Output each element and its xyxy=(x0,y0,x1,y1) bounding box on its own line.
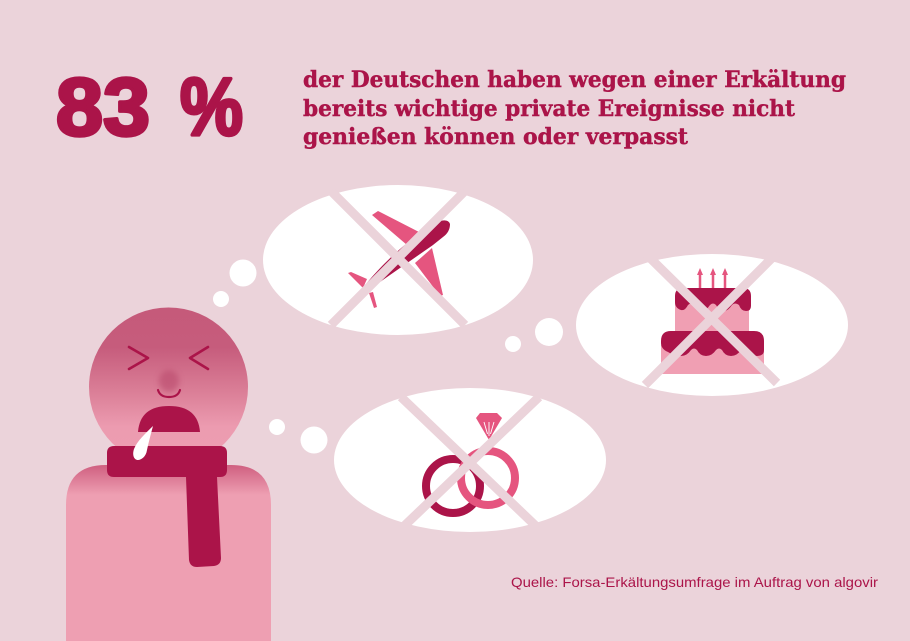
icon: wedding rings xyxy=(426,413,515,513)
scarf xyxy=(107,446,227,567)
thought bubble: wedding rings xyxy=(334,388,606,532)
runny nose drop xyxy=(133,426,153,460)
headline text xyxy=(303,67,846,150)
icon: birthday cake xyxy=(661,268,764,374)
red nose xyxy=(159,370,179,392)
headline statistic: 83 %: 83 xyxy=(56,62,150,153)
headline statistic: 83 % xyxy=(56,62,243,153)
headline statistic: 83 %: % xyxy=(180,62,243,153)
eyes xyxy=(129,347,208,369)
sick person figure xyxy=(66,308,271,641)
small thought circles xyxy=(213,260,563,454)
thought bubble: airplane xyxy=(263,185,533,335)
thought bubble: birthday cake xyxy=(576,253,848,396)
headline text: der Deutschen haben wegen einer Erkältung xyxy=(303,67,846,93)
mouth xyxy=(138,406,200,432)
headline text: genießen können oder verpasst xyxy=(303,124,689,150)
nose outline xyxy=(158,390,180,397)
head xyxy=(89,308,248,466)
icon: airplane xyxy=(348,211,450,308)
body xyxy=(66,465,271,641)
headline text: bereits wichtige private Ereignisse nicht xyxy=(303,96,796,122)
source note: Quelle: Forsa-Erkältungsumfrage im Auftrag von algovir xyxy=(511,574,878,590)
